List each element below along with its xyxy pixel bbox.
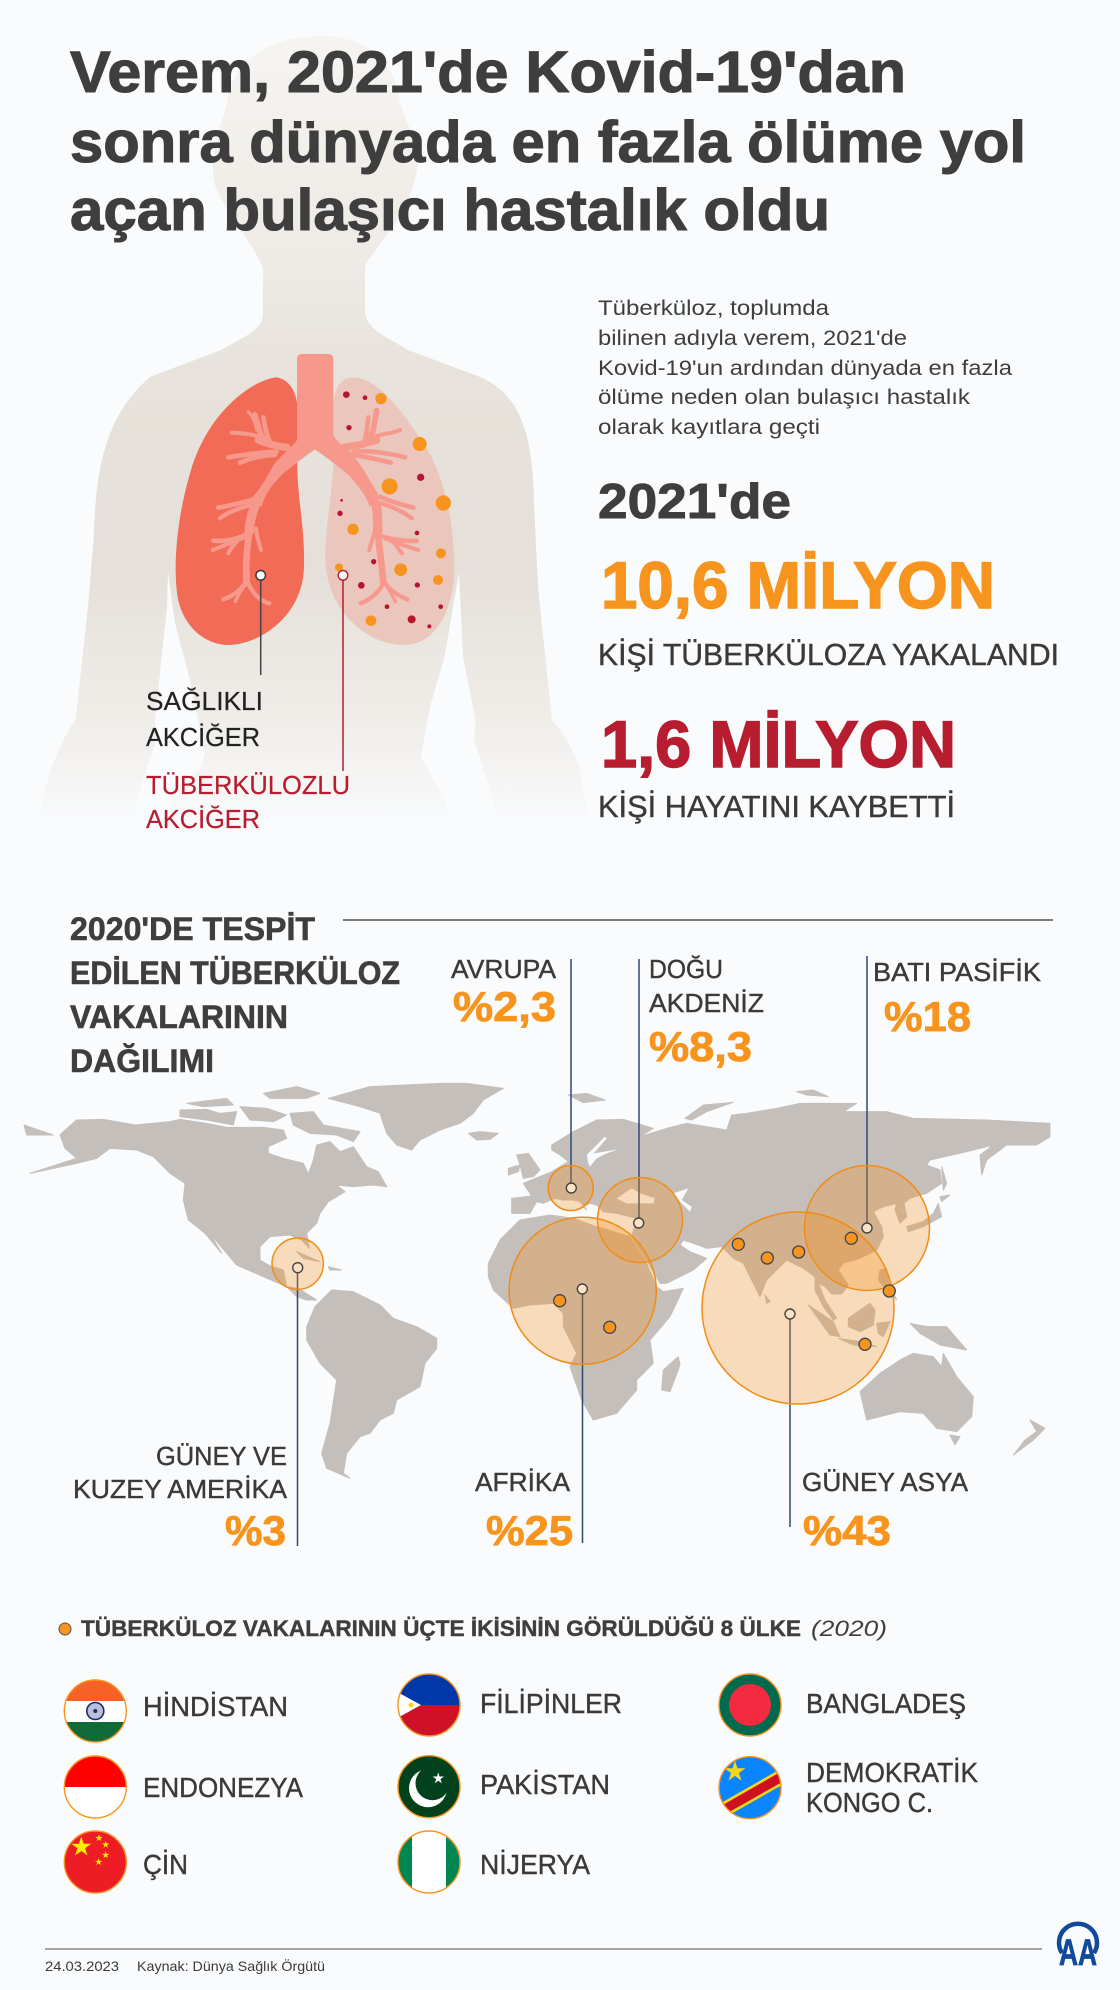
label: DR Congo: DEMOKRATİK bbox=[806, 1757, 978, 1788]
high burden country dots bbox=[554, 1232, 895, 1350]
label: Güney Asya: GÜNEY ASYA bbox=[802, 1467, 969, 1497]
orange tuberculosis spots bbox=[335, 393, 451, 626]
flag: DR Congo bbox=[718, 1756, 782, 1820]
lungs illustration bbox=[176, 354, 454, 645]
healthy lung pointer bbox=[256, 570, 266, 675]
region markers bbox=[293, 1183, 872, 1319]
legend heading: eight countries: (2020) bbox=[811, 1616, 887, 1641]
flag: Bangladesh bbox=[719, 1674, 781, 1736]
label: Batı Pasifik: %18 bbox=[884, 993, 971, 1040]
intro paragraph bbox=[598, 297, 1012, 439]
flag: Nigeria bbox=[398, 1831, 460, 1893]
title: Verem, 2021'de Kovid-19'dan bbox=[70, 40, 906, 105]
section heading: distribution bbox=[70, 911, 400, 1079]
tuberculosis lung pointer bbox=[338, 570, 348, 771]
title: açan bulaşıcı hastalık oldu bbox=[70, 178, 830, 243]
intro paragraph: ölüme neden olan bulaşıcı hastalık bbox=[598, 386, 971, 409]
label: DR Congo: KONGO C. bbox=[806, 1787, 933, 1818]
label: Avrupa bbox=[451, 954, 557, 1030]
section heading: distribution: DAĞILIMI bbox=[70, 1043, 214, 1079]
flag: Philippines bbox=[393, 1674, 460, 1736]
flag: Pakistan bbox=[398, 1756, 460, 1818]
stat: deaths bbox=[598, 707, 956, 824]
stat: cases bbox=[598, 548, 1059, 672]
label: Güney ve Kuzey Amerika: %3 bbox=[225, 1507, 286, 1554]
flag: India bbox=[64, 1680, 126, 1742]
label: Philippines: FİLİPİNLER bbox=[480, 1688, 622, 1719]
label: healthy lung: SAĞLIKLI bbox=[146, 686, 263, 716]
tuberculosis lung bbox=[325, 377, 454, 645]
stat year heading: 2021'de bbox=[598, 475, 791, 529]
world map bbox=[24, 1083, 1050, 1478]
label: tuberculosis lung: AKCİĞER bbox=[146, 804, 260, 834]
label: healthy lung bbox=[146, 686, 263, 752]
red tuberculosis spots bbox=[337, 391, 443, 628]
section heading: distribution: 2020'DE TESPİT bbox=[70, 911, 315, 947]
label: Güney ve Kuzey Amerika bbox=[73, 1441, 288, 1554]
label: Avrupa: AVRUPA bbox=[451, 954, 557, 984]
label: Doğu Akdeniz: AKDENİZ bbox=[649, 988, 764, 1018]
intro paragraph: Tüberküloz, toplumda bbox=[598, 297, 829, 320]
leader lines bbox=[298, 956, 867, 1546]
stat: deaths: 1,6 MİLYON bbox=[601, 707, 956, 781]
stat: deaths: KİŞİ HAYATINI KAYBETTİ bbox=[598, 789, 955, 824]
label: Doğu Akdeniz: DOĞU bbox=[649, 954, 723, 984]
title bbox=[70, 40, 1026, 243]
flag: Indonesia bbox=[64, 1756, 126, 1818]
logo: Anadolu Agency: AA bbox=[1059, 1932, 1097, 1973]
legend heading: eight countries: TÜBERKÜLOZ VAKALARININ ÜÇTE İKİSİNİN GÖRÜLDÜĞÜ 8 ÜLKE bbox=[81, 1616, 801, 1641]
intro paragraph: olarak kayıtlara geçti bbox=[598, 416, 820, 439]
label: Güney ve Kuzey Amerika: KUZEY AMERİKA bbox=[73, 1474, 288, 1504]
footer: date and source: 24.03.2023 bbox=[45, 1958, 119, 1974]
region bubbles bbox=[272, 1166, 930, 1404]
label: Avrupa: %2,3 bbox=[453, 983, 556, 1030]
flag: China bbox=[64, 1831, 126, 1893]
label: China: ÇİN bbox=[143, 1849, 188, 1880]
stat: cases: 10,6 MİLYON bbox=[601, 548, 995, 622]
inland seas bbox=[617, 1188, 655, 1203]
trachea and bronchi bbox=[213, 354, 418, 603]
label: Pakistan: PAKİSTAN bbox=[480, 1769, 610, 1800]
label: Güney Asya: %43 bbox=[803, 1507, 891, 1554]
logo: Anadolu Agency bbox=[1059, 1924, 1097, 1973]
label: Nigeria: NİJERYA bbox=[480, 1849, 590, 1880]
label: Bangladesh: BANGLADEŞ bbox=[806, 1688, 966, 1719]
label: Güney ve Kuzey Amerika: GÜNEY VE bbox=[156, 1441, 287, 1471]
label: Batı Pasifik: BATI PASİFİK bbox=[873, 957, 1042, 987]
section heading: distribution: EDİLEN TÜBERKÜLOZ bbox=[70, 955, 400, 991]
label: Doğu Akdeniz: %8,3 bbox=[649, 1023, 752, 1070]
intro paragraph: bilinen adıyla verem, 2021'de bbox=[598, 327, 907, 350]
label: Afrika: AFRİKA bbox=[475, 1467, 571, 1497]
intro paragraph: Kovid-19'un ardından dünyada en fazla bbox=[598, 357, 1012, 380]
footer: date and source bbox=[45, 1957, 325, 1974]
healthy lung bbox=[176, 377, 304, 645]
stat: cases: KİŞİ TÜBERKÜLOZA YAKALANDI bbox=[598, 637, 1059, 672]
label: tuberculosis lung bbox=[146, 770, 350, 834]
label: tuberculosis lung: TÜBERKÜLOZLU bbox=[146, 770, 350, 800]
label: healthy lung: AKCİĞER bbox=[146, 722, 260, 752]
label: Güney Asya bbox=[802, 1467, 969, 1554]
label: Afrika bbox=[475, 1467, 573, 1554]
label: Afrika: %25 bbox=[486, 1507, 573, 1554]
section heading: distribution: VAKALARININ bbox=[70, 999, 288, 1035]
footer: date and source: Kaynak: Dünya Sağlık Örgütü bbox=[137, 1957, 325, 1974]
label: Batı Pasifik bbox=[873, 957, 1042, 1040]
label: Indonesia: ENDONEZYA bbox=[143, 1772, 303, 1803]
label: DR Congo bbox=[806, 1757, 978, 1818]
label: Doğu Akdeniz bbox=[649, 954, 764, 1070]
label: India: HİNDİSTAN bbox=[143, 1691, 288, 1722]
title: sonra dünyada en fazla ölüme yol bbox=[70, 110, 1026, 175]
human silhouette bbox=[40, 36, 590, 830]
